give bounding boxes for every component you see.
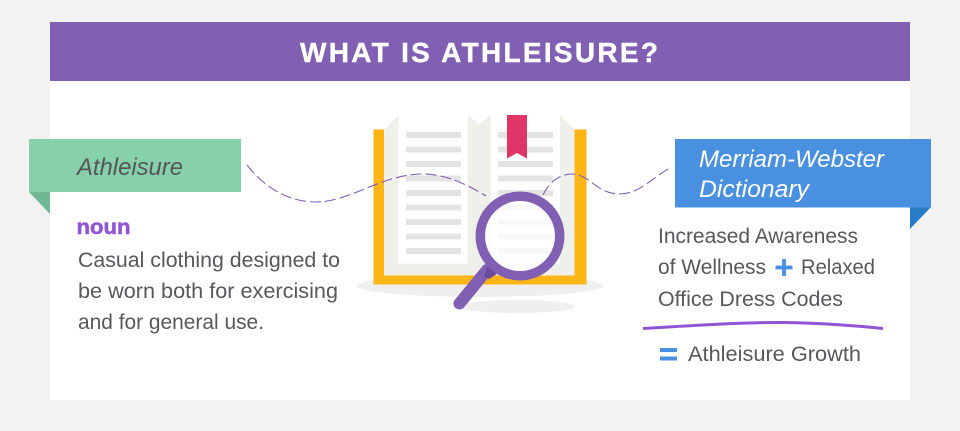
title banner: WHAT IS ATHLEISURE? xyxy=(300,37,658,68)
magnifier handle xyxy=(460,266,497,304)
white left page xyxy=(398,115,468,264)
definition text xyxy=(76,216,340,334)
equation text xyxy=(658,225,875,311)
icon: plus xyxy=(776,259,792,276)
purple divider stroke xyxy=(643,322,883,328)
title banner xyxy=(50,22,910,81)
definition text: Casual clothing designed to xyxy=(78,249,340,272)
equation text: Relaxed xyxy=(801,256,875,279)
ground shadows xyxy=(357,275,603,313)
definition text: and for general use. xyxy=(78,311,264,334)
panel: main card xyxy=(50,22,910,400)
bookmark xyxy=(507,115,527,158)
icon: equals xyxy=(660,350,677,358)
equation text: Increased Awareness xyxy=(658,225,858,248)
white right page xyxy=(491,115,560,264)
magnifier lens xyxy=(485,201,555,271)
book cover xyxy=(374,130,586,284)
ribbon: Athleisure xyxy=(29,139,241,214)
ribbon: Merriam-Webster Dictionary: Dictionary xyxy=(699,176,811,203)
icon: open book with magnifying glass xyxy=(357,115,603,313)
dashed connector line xyxy=(247,165,672,202)
ribbon: Athleisure: Athleisure xyxy=(75,154,183,181)
left page text lines xyxy=(406,132,461,254)
equation text: Office Dress Codes xyxy=(658,288,843,311)
result: Athleisure Growth: Athleisure Growth xyxy=(688,343,861,366)
ribbon: Merriam-Webster Dictionary xyxy=(675,139,931,229)
ribbon: Merriam-Webster Dictionary: Merriam-Webster xyxy=(699,146,885,173)
right page text lines xyxy=(498,132,553,254)
equation text: of Wellness xyxy=(658,256,766,279)
definition text: be worn both for exercising xyxy=(78,280,338,303)
definition text: noun xyxy=(76,216,130,239)
book pale pages xyxy=(384,115,574,276)
magnifier ring xyxy=(480,196,560,276)
